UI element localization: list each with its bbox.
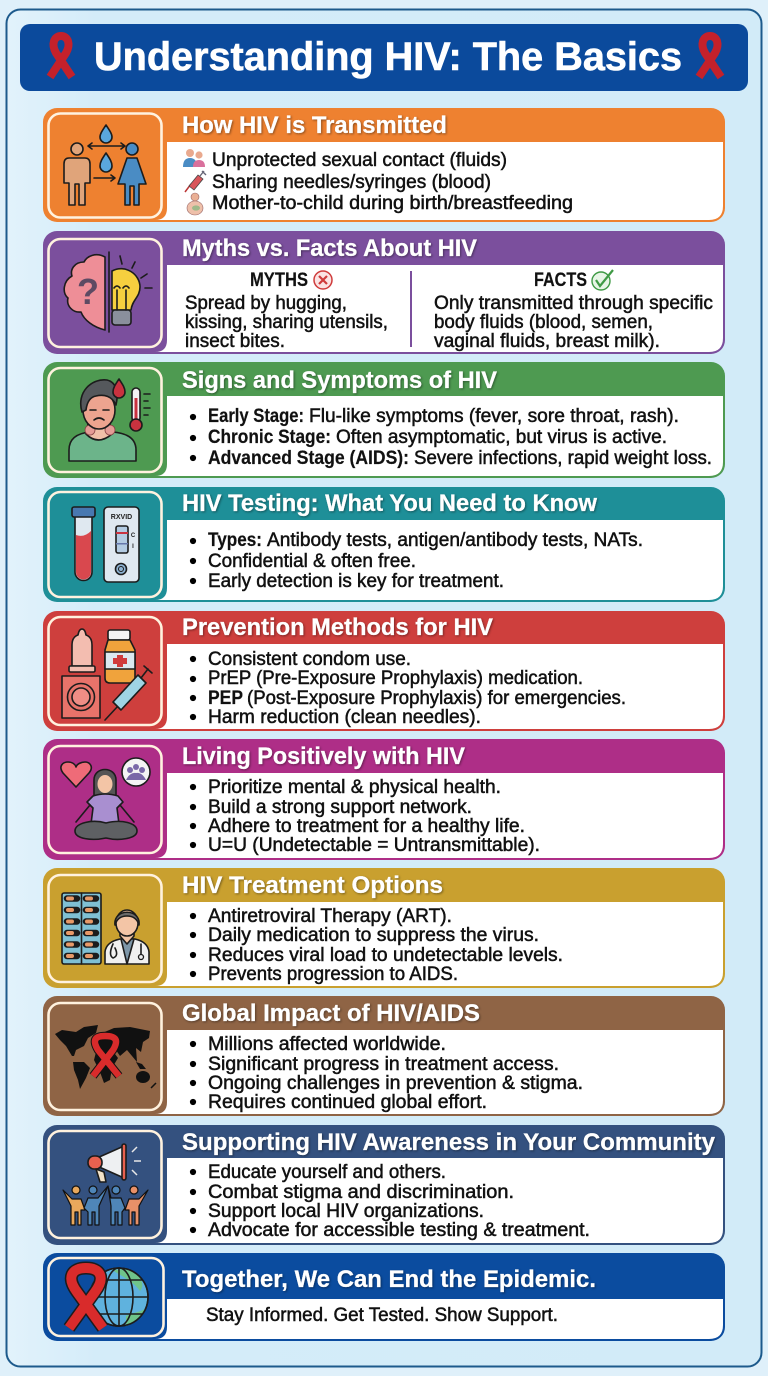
testing list: Early detection is key for treatment. <box>208 571 504 592</box>
symptom list: Severe infections, rapid weight loss. <box>414 448 712 469</box>
icon: blood tube and rapid test: RXVID <box>111 514 132 521</box>
text: sexual contact: Unprotected sexual contact (fluids) <box>212 150 507 171</box>
impact list <box>190 1034 583 1113</box>
panel: call to action <box>43 1253 725 1341</box>
myths text: insect bites. <box>185 331 285 352</box>
facts text: body fluids (blood, semen, <box>434 312 653 333</box>
treatment list: Prevents progression to AIDS. <box>208 964 458 985</box>
testing list: Antibody tests, antigen/antibody tests, NATs. <box>267 530 643 551</box>
heading: Prevention Methods for HIV <box>182 614 493 641</box>
text: sharing needles: Sharing needles/syringes (blood) <box>212 172 491 193</box>
icon: mother and child <box>187 193 203 215</box>
prevention list: Harm reduction (clean needles). <box>208 707 481 728</box>
myths column <box>185 270 388 352</box>
heading: HIV Testing: What You Need to Know <box>182 490 597 517</box>
icon: red ribbon left <box>50 36 72 77</box>
icon: syringe <box>185 171 206 192</box>
myths text: kissing, sharing utensils, <box>185 312 388 333</box>
impact list: Ongoing challenges in prevention & stigma. <box>208 1073 583 1094</box>
symptom list: Flu-like symptoms (fever, sore throat, rash). <box>309 406 679 427</box>
panel: prevention methods <box>43 611 725 731</box>
icon: red ribbon right <box>699 36 721 77</box>
icon: blood tube and rapid test: I <box>132 544 134 550</box>
myths text <box>185 293 388 352</box>
facts label: FACTS <box>534 270 587 291</box>
testing list: Confidential & often free. <box>208 551 416 572</box>
prevention list <box>190 649 626 728</box>
heading: Signs and Symptoms of HIV <box>182 367 497 394</box>
heading: Supporting HIV Awareness in Your Community <box>182 1129 716 1156</box>
support list <box>190 1162 590 1241</box>
impact list: Millions affected worldwide. <box>208 1034 446 1055</box>
treatment list <box>190 906 563 985</box>
living list <box>190 777 540 856</box>
panel: signs and symptoms <box>43 362 725 478</box>
living list: Build a strong support network. <box>208 797 472 818</box>
heading: How HIV is Transmitted <box>182 112 447 139</box>
icon: blood tube and rapid test: C <box>131 533 136 539</box>
icon: couple <box>183 149 205 167</box>
myths text: Spread by hugging, <box>185 293 347 314</box>
icon: blood tube and rapid test <box>72 507 139 582</box>
title banner <box>20 24 748 91</box>
support list: Advocate for accessible testing & treatment. <box>208 1220 590 1241</box>
icon: brain and light bulb <box>64 252 152 332</box>
support list: Combat stigma and discrimination. <box>208 1182 514 1203</box>
impact list: Significant progress in treatment access. <box>208 1054 559 1075</box>
symptom list: Often asymptomatic, but virus is active. <box>336 427 667 448</box>
panel: how HIV is transmitted <box>43 108 725 222</box>
treatment list: Daily medication to suppress the virus. <box>208 925 539 946</box>
symptom list <box>190 406 712 469</box>
testing list <box>190 530 643 592</box>
icon: meditating person with heart and support bubble <box>61 758 150 839</box>
tagline: Stay Informed. Get Tested. Show Support. <box>206 1305 558 1326</box>
panel: treatment options <box>43 868 725 988</box>
symptom list: Chronic Stage: <box>208 427 331 448</box>
icon: megaphone and community <box>63 1144 148 1225</box>
prevention list: Consistent condom use. <box>208 649 411 670</box>
icon: condom, medication, syringe <box>62 629 152 720</box>
myths label: MYTHS <box>250 270 308 291</box>
icon: red cross <box>314 271 332 289</box>
treatment list: Reduces viral load to undetectable levels. <box>208 945 563 966</box>
facts column <box>434 270 713 352</box>
icon: green check <box>592 270 613 290</box>
heading: HIV Treatment Options <box>182 872 443 899</box>
facts text: Only transmitted through specific <box>434 293 713 314</box>
prevention list: (Post-Exposure Prophylaxis) for emergencies. <box>247 688 626 709</box>
panel: global impact <box>43 996 725 1116</box>
prevention list: PEP <box>208 688 243 709</box>
icon: transmission between people <box>64 125 146 205</box>
icon: sick person with thermometer <box>69 379 150 461</box>
testing list: Types: <box>208 530 262 551</box>
prevention list: PrEP (Pre-Exposure Prophylaxis) medication. <box>208 668 583 689</box>
panel: living positively <box>43 739 725 860</box>
heading: Living Positively with HIV <box>182 743 465 770</box>
heading: Myths vs. Facts About HIV <box>182 235 477 262</box>
text: mother to child: Mother-to-child during birth/breastfeeding <box>212 193 573 214</box>
symptom list: Early Stage: <box>208 406 304 427</box>
impact list: Requires continued global effort. <box>208 1092 487 1113</box>
icon: pill blister and doctor <box>62 893 149 964</box>
icon: brain and light bulb: ? <box>77 271 99 312</box>
symptom list: Advanced Stage (AIDS): <box>208 448 409 469</box>
living list: U=U (Undetectable = Untransmittable). <box>208 835 540 856</box>
living list: Adhere to treatment for a healthy life. <box>208 816 525 837</box>
panel: myths vs facts <box>43 231 725 354</box>
icon: ribbon and globe <box>69 1268 148 1328</box>
heading: Together, We Can End the Epidemic. <box>182 1266 596 1293</box>
living list: Prioritize mental & physical health. <box>208 777 501 798</box>
heading: Global Impact of HIV/AIDS <box>182 1000 480 1027</box>
panel: supporting awareness <box>43 1125 725 1245</box>
support list: Support local HIV organizations. <box>208 1201 484 1222</box>
title: Understanding HIV: The Basics <box>94 35 682 79</box>
panel: HIV testing <box>43 487 725 602</box>
support list: Educate yourself and others. <box>208 1162 446 1183</box>
treatment list: Antiretroviral Therapy (ART). <box>208 906 452 927</box>
facts text: vaginal fluids, breast milk). <box>434 331 660 352</box>
icon: world map with ribbon <box>55 1025 156 1089</box>
facts text <box>434 293 713 352</box>
